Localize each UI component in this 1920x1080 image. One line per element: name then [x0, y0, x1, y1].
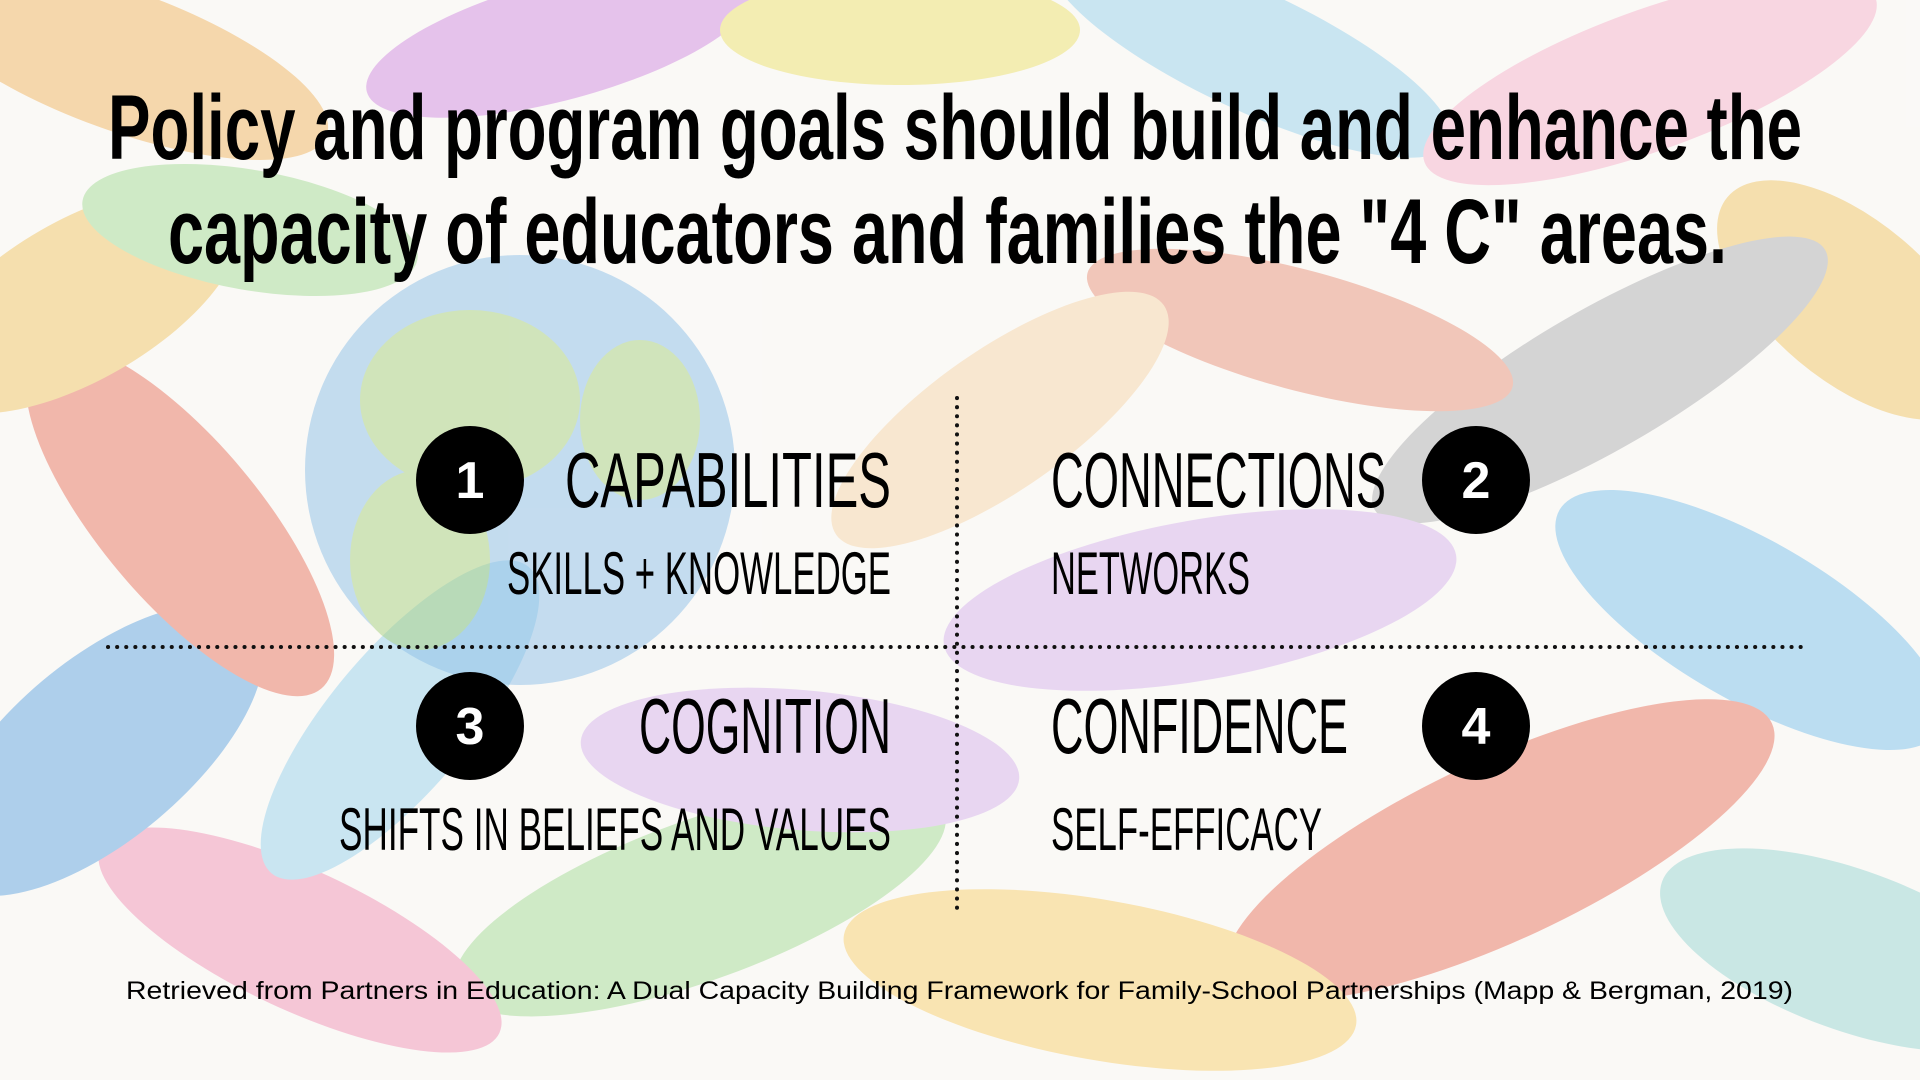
item 1: capabilities	[416, 426, 891, 607]
title	[108, 77, 1802, 283]
item 4: confidence: SELF-EFFICACY	[1051, 796, 1322, 863]
item 4: confidence: CONFIDENCE	[1051, 682, 1348, 770]
item 1: capabilities: 1	[456, 452, 484, 510]
item 3: cognition	[339, 672, 891, 863]
footer citation: Retrieved from Partners in Education: A Dual Capacity Building Framework for Family-School Partnerships (Mapp & Bergman, 2019)	[126, 977, 1793, 1005]
item 4: confidence	[1051, 672, 1530, 863]
item 3: cognition: 3	[456, 698, 484, 756]
item 3: cognition: COGNITION	[639, 682, 891, 770]
dotted divider lines	[108, 398, 1802, 912]
item 3: cognition: SHIFTS IN BELIEFS AND VALUES	[339, 796, 891, 863]
item 2: connections: CONNECTIONS	[1051, 436, 1386, 524]
item 2: connections	[1051, 426, 1530, 607]
item 2: connections: NETWORKS	[1051, 540, 1250, 607]
icon: faded globe	[305, 255, 735, 685]
item 1: capabilities: CAPABILITIES	[565, 436, 891, 524]
item 1: capabilities: SKILLS + KNOWLEDGE	[507, 540, 891, 607]
item 4: confidence: 4	[1462, 698, 1491, 756]
item 2: connections: 2	[1462, 452, 1490, 510]
